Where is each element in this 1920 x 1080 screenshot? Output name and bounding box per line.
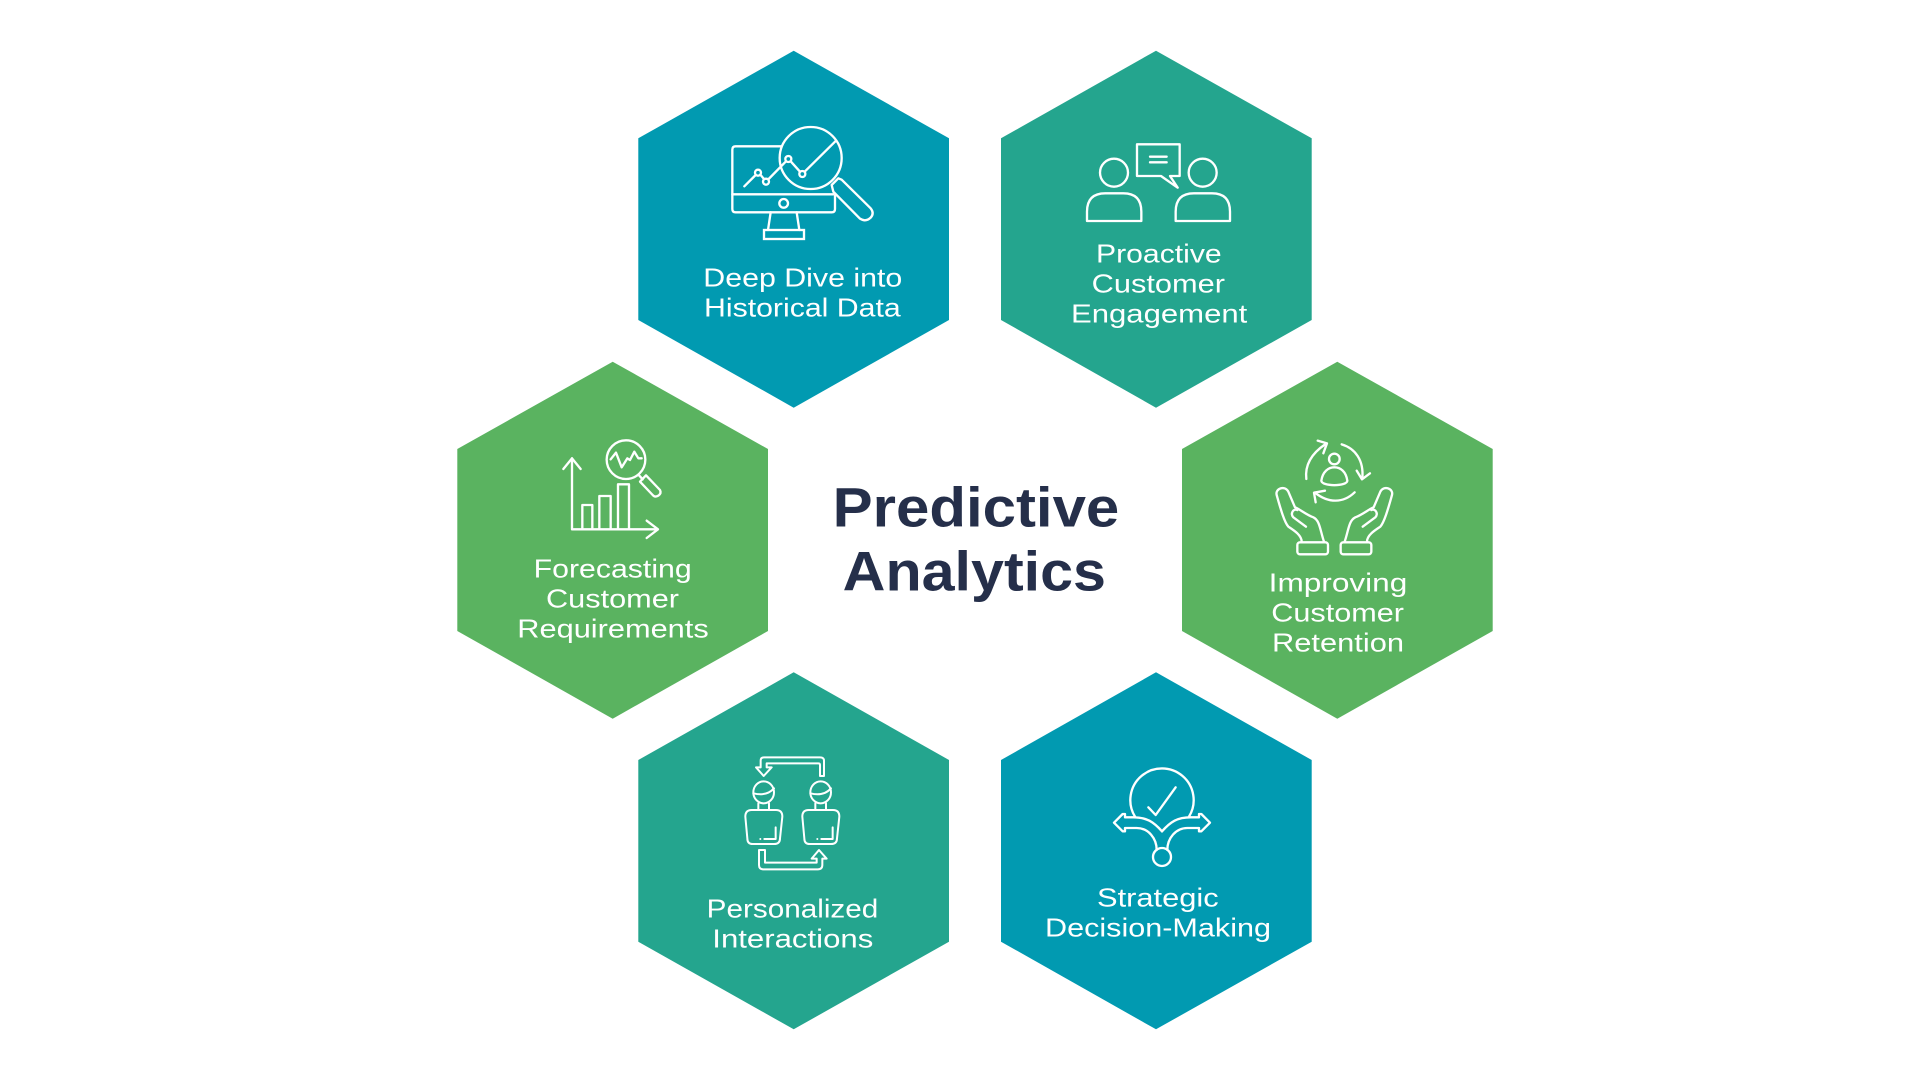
label: improving customer retention: Improving bbox=[1269, 568, 1407, 598]
label: proactive customer engagement: Engagement bbox=[1071, 299, 1248, 329]
icon: monitor with magnifier bbox=[732, 127, 873, 239]
label: proactive customer engagement bbox=[1071, 239, 1248, 329]
icon: bar chart with magnifier bbox=[563, 440, 661, 538]
panel: improving customer retention bbox=[1182, 362, 1493, 719]
label: personalized interactions: Personalized bbox=[707, 894, 878, 924]
label: forecasting customer requirements bbox=[517, 554, 709, 644]
label: deep dive into historical data bbox=[703, 263, 902, 323]
label: improving customer retention: Retention bbox=[1272, 628, 1404, 658]
panel: personalized interactions bbox=[638, 672, 949, 1029]
panel: proactive customer engagement bbox=[1001, 51, 1312, 408]
title: Analytics bbox=[843, 540, 1106, 603]
label: strategic decision-making: Strategic bbox=[1097, 883, 1219, 913]
label: strategic decision-making: Decision-Making bbox=[1045, 913, 1271, 943]
label: deep dive into historical data: Historical Data bbox=[704, 293, 901, 323]
label: deep dive into historical data: Deep Dive into bbox=[703, 263, 902, 293]
label: proactive customer engagement: Proactive bbox=[1096, 239, 1222, 269]
label: proactive customer engagement: Customer bbox=[1092, 269, 1225, 299]
icon: hands holding person with cycle arrows bbox=[1276, 441, 1392, 554]
label: personalized interactions bbox=[707, 894, 878, 954]
label: forecasting customer requirements: Customer bbox=[546, 584, 679, 614]
icon: two people talking bbox=[1087, 144, 1230, 221]
panel: forecasting customer requirements bbox=[457, 362, 768, 719]
title bbox=[833, 476, 1119, 603]
label: improving customer retention bbox=[1269, 568, 1407, 658]
icon: two people exchanging arrows bbox=[745, 757, 839, 869]
label: improving customer retention: Customer bbox=[1271, 598, 1404, 628]
label: forecasting customer requirements: Forecasting bbox=[534, 554, 692, 584]
label: forecasting customer requirements: Requirements bbox=[517, 614, 709, 644]
title: Predictive bbox=[833, 476, 1119, 539]
label: personalized interactions: Interactions bbox=[712, 924, 873, 954]
panel: deep dive into historical data bbox=[638, 51, 949, 408]
panel: strategic decision-making bbox=[1001, 672, 1312, 1029]
label: strategic decision-making bbox=[1045, 883, 1271, 943]
icon: diverging arrows with check mark bbox=[1114, 768, 1210, 866]
